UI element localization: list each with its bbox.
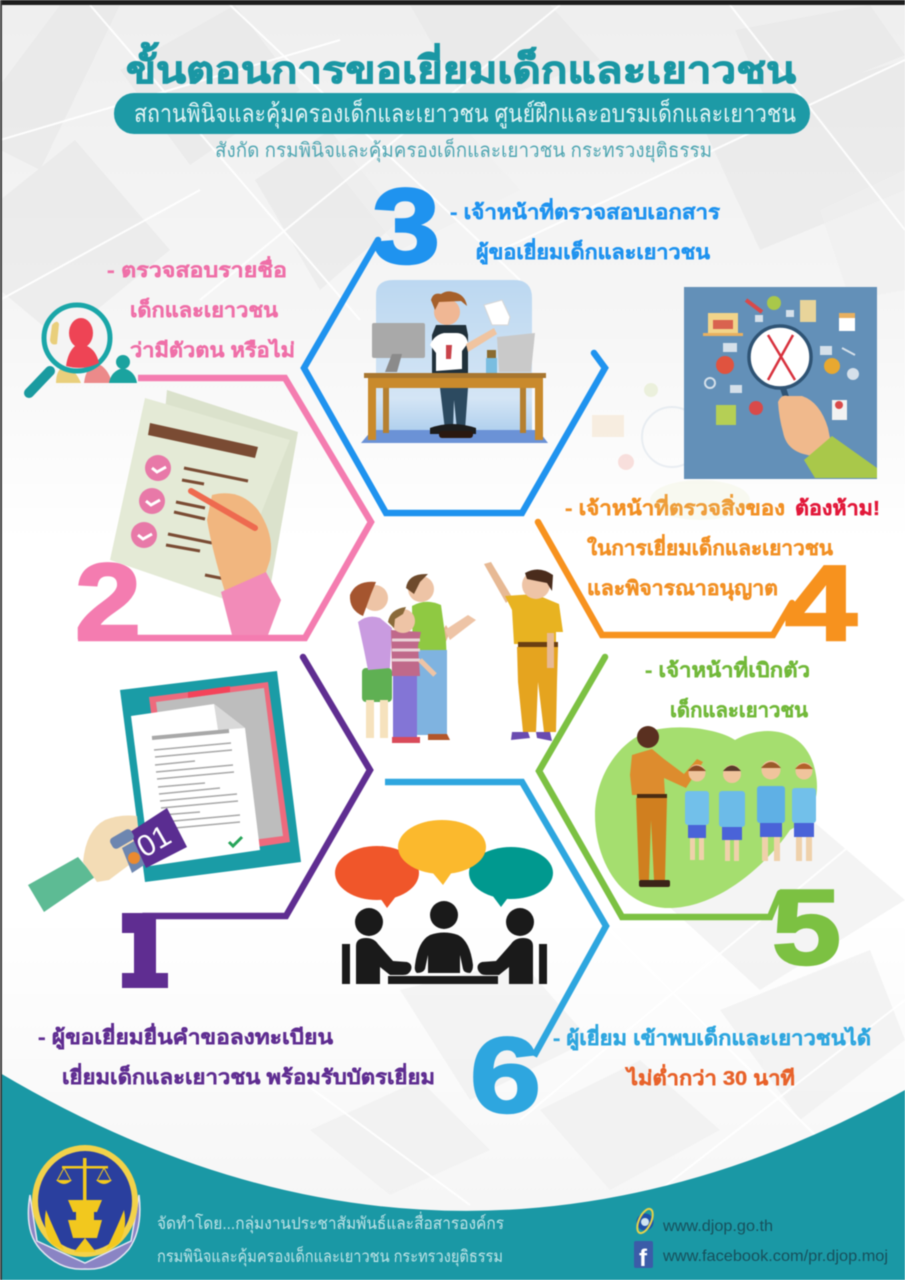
family group <box>350 574 476 743</box>
step 1 text: เยี่ยมเด็กและเยาวชน พร้อมรับบัตรเยี่ยม <box>62 1062 435 1089</box>
step 2 text: - ตรวจสอบรายชื่อ <box>107 255 287 282</box>
step 2 text: เด็กและเยาวชน <box>130 297 278 322</box>
step 2 text: ว่ามีตัวตน หรือไม่ <box>130 338 295 362</box>
illustration: clipboard and card <box>28 671 301 912</box>
step 6 hexagon line <box>385 782 606 1056</box>
footer organiser text <box>157 1211 504 1267</box>
logo emblem <box>28 1145 140 1269</box>
step 4 text: - เจ้าหน้าที่ตรวจสิ่งของ <box>565 493 785 520</box>
step 1 text: - ผู้ขอเยี่ยมยื่นคำขอลงทะเบียน <box>38 1022 333 1051</box>
number 4: 4 <box>785 543 857 663</box>
number 6: 6 <box>470 1015 541 1135</box>
step 5 text: เด็กและเยาวชน <box>670 697 808 722</box>
number 2: 2 <box>75 541 141 661</box>
footer organiser text: จัดทำโดย...กลุ่มงานประชาสัมพันธ์และสื่อสารองค์กร <box>157 1211 504 1234</box>
step 1 hexagon line <box>143 657 370 916</box>
footer links <box>662 1218 888 1265</box>
step 5 text <box>645 655 810 722</box>
step 6 text <box>553 1023 871 1090</box>
title: ขั้นตอนการขอเยี่ยมเด็กและเยาวชน <box>126 42 796 92</box>
subtitle pill <box>114 93 810 134</box>
step 6 text: ไม่ต่ำกว่า 30 นาที <box>625 1063 795 1090</box>
illustration: prohibited items magnifier panel <box>592 287 877 520</box>
footer teal band <box>0 1073 905 1280</box>
illustration: clipboard and card: 01 <box>131 819 177 864</box>
icon: browser <box>634 1207 656 1235</box>
subheading: สังกัด กรมพินิจและคุ้มครองเด็กและเยาวชน กระทรวงยุติธรรม <box>215 137 712 163</box>
step 1 text <box>38 1022 435 1089</box>
step 4 hexagon line <box>538 522 792 635</box>
step 4 text <box>565 493 880 601</box>
footer organiser text: กรมพินิจและคุ้มครองเด็กและเยาวชน กระทรวงยุติธรรม <box>157 1245 503 1267</box>
step 6 text: - ผู้เยี่ยม เข้าพบเด็กและเยาวชนได้ <box>553 1023 871 1052</box>
step 3 text: - เจ้าหน้าที่ตรวจสอบเอกสาร <box>450 197 720 224</box>
step 2 hexagon line <box>78 378 371 638</box>
step 3 text <box>450 197 720 266</box>
illustration: officer at desk <box>361 280 548 443</box>
footer links: www.djop.go.th <box>662 1218 773 1235</box>
icon: facebook: f <box>639 1245 648 1272</box>
number 5: 5 <box>772 867 841 987</box>
left dark edge <box>0 0 2 1280</box>
step 4 text: และพิจารณาอนุญาต <box>587 578 778 601</box>
top black edge <box>0 0 905 5</box>
step 3 hexagon line <box>304 240 605 513</box>
officer <box>484 562 563 741</box>
footer links: www.facebook.com/pr.djop.moj <box>662 1248 888 1265</box>
number 3: 3 <box>372 166 440 286</box>
illustration: officer and four boys on green blob <box>595 726 817 908</box>
step 4 text: ต้องห้าม! <box>795 497 880 520</box>
step 5 hexagon line <box>539 657 780 917</box>
number 1 <box>122 913 168 988</box>
illustration: family and officer <box>350 562 563 743</box>
step 3 text: ผู้ขอเยี่ยมเด็กและเยาวชน <box>476 237 710 266</box>
step 2 text <box>107 255 295 362</box>
illustration: checklist and hand <box>110 390 298 635</box>
icon: facebook <box>634 1241 653 1272</box>
step 5 text: - เจ้าหน้าที่เบิกตัว <box>645 655 810 682</box>
icon: magnifier with people <box>29 305 137 393</box>
subtitle pill: สถานพินิจและคุ้มครองเด็กและเยาวชน ศูนย์ฝึกและอบรมเด็กและเยาวชน <box>134 98 796 129</box>
step 4 text: ในการเยี่ยมเด็กและเยาวชน <box>587 533 833 560</box>
illustration: meeting people and speech bubbles <box>335 820 553 984</box>
